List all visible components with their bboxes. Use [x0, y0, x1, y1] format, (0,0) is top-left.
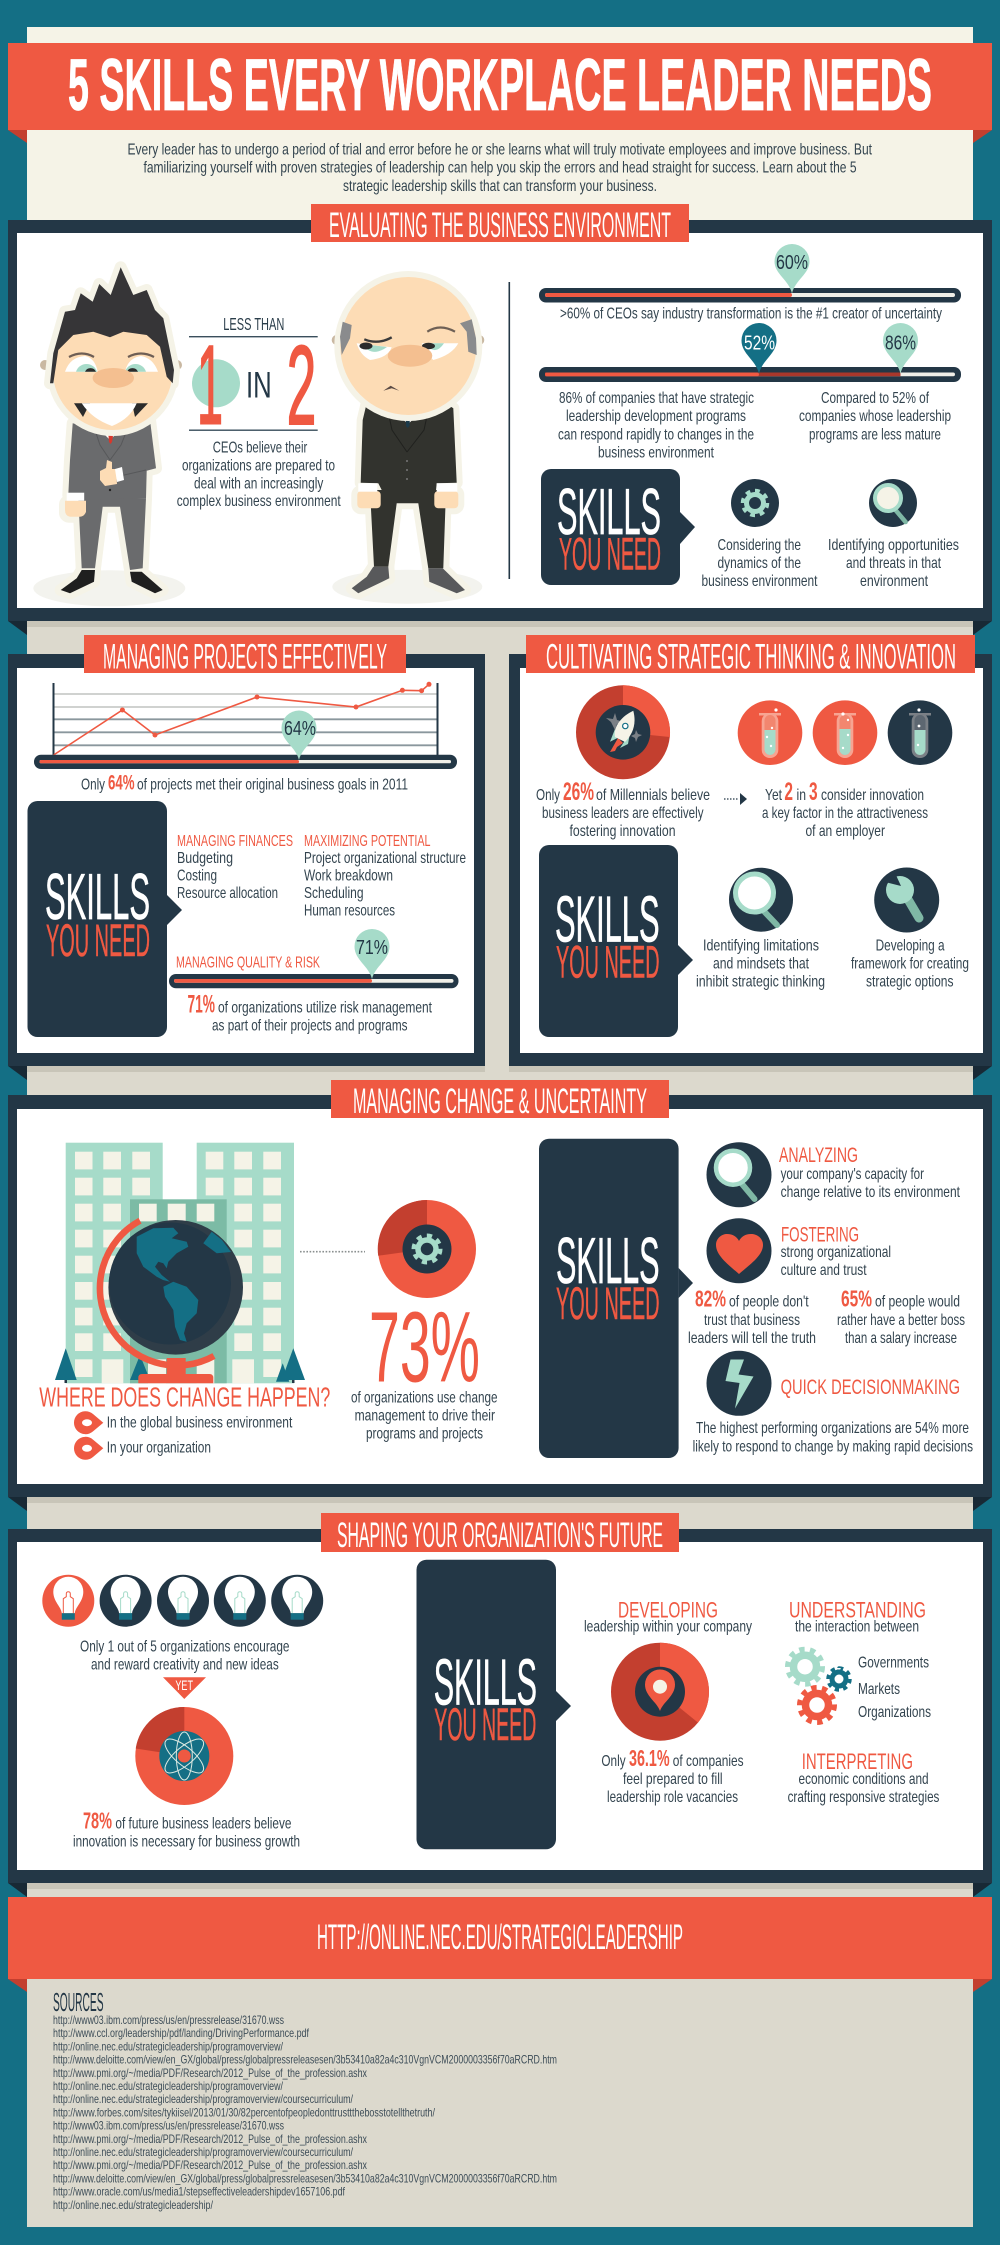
bullet: global business environment: In the global business environment: [107, 1414, 293, 1431]
text: only 64 percent of projects: of projects met their original business goals in 2011: [137, 776, 408, 793]
pin: 64%: 64%: [284, 718, 316, 740]
statistic: less than 1 in 2: 2: [287, 323, 316, 448]
panel: managing change and uncertainty: MANAGING CHANGE & UNCERTAINTY: [353, 1082, 647, 1121]
text: fostering: strong organizational: [781, 1244, 891, 1261]
statistic: 73 percent: 73%: [369, 1292, 480, 1404]
progress bar: 64 percent: [34, 710, 457, 769]
text: only 64 percent of projects: [81, 771, 408, 794]
list: governments markets organizations: Governments: [858, 1655, 929, 1672]
list: managing finances: Costing: [177, 868, 217, 885]
text: yet 2 in 3: of an employer: [806, 823, 885, 840]
text: considering the dynamics: [702, 537, 818, 590]
donut chart: 36.1 percent with pin: [611, 1643, 709, 1741]
sources list: http://www.pmi.org/~/media/PDF/Research/2012_Pulse_of_the_profession.ashx: [53, 2066, 367, 2080]
text: analyzing: [779, 1144, 960, 1201]
icon: atom: [160, 1732, 208, 1780]
text: 78 percent of future leaders: innovation is necessary for business growth: [73, 1834, 300, 1851]
panel: managing change and uncertainty: [8, 1080, 992, 1511]
callout: skills you need: [539, 845, 693, 1037]
text: compared to 52 percent: Compared to 52% of: [821, 390, 929, 407]
text: only 26 percent of millennials: of Millennials believe: [596, 787, 710, 804]
text: only 1 out of 5: and reward creativity and new ideas: [91, 1657, 279, 1674]
list: maximizing potential: Human resources: [304, 903, 395, 920]
list: managing finances: [177, 833, 293, 902]
bullet: global business environment: [74, 1411, 293, 1434]
text: 71 percent of organizations: [188, 991, 432, 1035]
text: identifying opportunities: environment: [860, 573, 928, 590]
text: 65 percent of people: of people would: [875, 1294, 960, 1311]
text: considering the dynamics: Considering the: [718, 537, 801, 554]
banner: website url: [8, 1897, 992, 1992]
text: understanding: UNDERSTANDING: [789, 1598, 926, 1623]
icon: rocket: [606, 711, 642, 752]
text: 71 percent of organizations: as part of their projects and programs: [212, 1018, 408, 1035]
text: yet 2 in 3: a key factor in the attractiveness: [762, 805, 928, 822]
callout: skills you need: [28, 801, 182, 1037]
text: only 26 percent of millennials: 26%: [563, 778, 594, 806]
sources list: http://www03.ibm.com/press/us/en/pressrelease/31670.wss: [53, 2119, 284, 2133]
sources list: http://www.deloitte.com/view/en_GX/global/press/globalpressreleasesen/3b53410a82a4c310VgnVCM2000003356f70aRCRD.htm: [53, 2053, 557, 2067]
text: fostering: culture and trust: [781, 1262, 867, 1279]
sources list: [53, 1987, 557, 2212]
icon: test tube three: [888, 700, 952, 765]
text: yet 2 in 3: in: [796, 787, 806, 804]
sources list: http://www.oracle.com/us/media1/stepseffectiveleadershipdev1657106.pdf: [53, 2185, 345, 2199]
text: analyzing: your company's capacity for: [781, 1166, 924, 1183]
callout: skills you need: YOU NEED: [556, 1278, 660, 1329]
text: 82 percent of people: [688, 1286, 816, 1347]
bullet: your organization: [74, 1437, 211, 1460]
list: maximizing potential: [304, 833, 466, 920]
progress bar: 52 and 86 percent: [539, 323, 961, 462]
text: identifying opportunities: [828, 537, 959, 590]
text: developing: [584, 1598, 752, 1636]
text: 86 percent of companies: 86% of companies that have strategic: [559, 390, 754, 407]
sources list: http://online.nec.edu/strategicleadership/programoverview/: [53, 2079, 283, 2093]
divider: [508, 282, 510, 579]
panel: shaping your organization's future: [8, 1513, 992, 1897]
text: identifying limitations: [696, 938, 825, 991]
heading: managing projects: [84, 635, 406, 676]
list: maximizing potential: Work breakdown: [304, 868, 393, 885]
pin: 71%: 71%: [356, 937, 388, 959]
statistic: 73 percent: management to drive their: [355, 1408, 496, 1425]
heading: evaluating: [311, 204, 689, 245]
text: 82 percent of people: of people don't: [729, 1294, 809, 1311]
text: 65 percent of people: than a salary increase: [845, 1330, 957, 1347]
list: governments markets organizations: Organizations: [858, 1704, 931, 1721]
list: managing finances: Budgeting: [177, 850, 233, 867]
sources list: http://www.ccl.org/leadership/pdf/landing/DrivingPerformance.pdf: [53, 2026, 309, 2040]
sources list: http://www03.ibm.com/press/us/en/pressrelease/31670.wss: [53, 2013, 284, 2027]
panel: managing projects effectively: [8, 635, 485, 1080]
text: 82 percent of people: leaders will tell the truth: [688, 1330, 816, 1347]
text: analyzing: ANALYZING: [779, 1144, 858, 1167]
callout: skills you need: SKILLS: [556, 1224, 660, 1297]
text: only 36.1 percent: leadership role vacancies: [607, 1789, 738, 1806]
statistic: less than 1 in 2: 1: [197, 322, 223, 447]
list: maximizing potential: MAXIMIZING POTENTIAL: [304, 833, 431, 850]
callout: skills you need: YOU NEED: [556, 937, 660, 988]
statistic: less than 1 in 2: complex business environment: [177, 493, 341, 510]
donut chart: 73 percent with gear: [378, 1200, 476, 1298]
text: compared to 52 percent: companies whose leadership: [799, 408, 951, 425]
icon: lightning bolt: [706, 1351, 772, 1416]
illustration: frowning boss: [332, 277, 484, 604]
statistic: 73 percent: programs and projects: [366, 1426, 483, 1443]
text: yet 2 in 3: consider innovation: [821, 787, 924, 804]
text: identifying limitations: and mindsets that: [713, 956, 809, 973]
text: only 26 percent of millennials: business leaders are effectively: [542, 805, 704, 822]
text: interpreting: economic conditions and: [798, 1771, 929, 1788]
text: yet 2 in 3: Yet: [765, 787, 782, 804]
sources list: http://www.pmi.org/~/media/PDF/Research/2012_Pulse_of_the_profession.ashx: [53, 2132, 367, 2146]
sources list: SOURCES: [53, 1987, 104, 2017]
list: governments markets organizations: Markets: [858, 1681, 900, 1698]
text: 86 percent of companies: business environment: [598, 444, 714, 462]
callout: skills you need: YOU NEED: [559, 528, 661, 580]
pin: 86%: 86%: [885, 332, 916, 354]
statistic: 73 percent: [351, 1292, 498, 1443]
callout: skills you need: [416, 1560, 571, 1849]
icon: heart: [706, 1218, 772, 1283]
statistic: 73 percent: of organizations use change: [351, 1390, 498, 1407]
panel: cultivating strategic thinking: [509, 635, 992, 1080]
line chart: [54, 682, 438, 755]
statistic: less than 1 in 2: LESS THAN: [223, 314, 284, 334]
panel: evaluating the business environment: [8, 204, 992, 635]
text: only 26 percent of millennials: fostering innovation: [570, 823, 676, 840]
icon: test tube two: [813, 700, 877, 765]
text: only 36.1 percent: 36.1%: [629, 1745, 670, 1771]
icon: test tube one: [738, 700, 802, 765]
icon: magnifying glass: [869, 479, 917, 527]
sources list: http://online.nec.edu/strategicleadership/: [53, 2198, 213, 2212]
statistic: less than 1 in 2: [177, 314, 341, 510]
text: developing: DEVELOPING: [618, 1598, 718, 1623]
donut chart: 26 percent with rocket: [576, 685, 670, 779]
text: yet 2 in 3: 3: [809, 778, 818, 806]
icon: magnifying glass: [729, 868, 793, 932]
text: only 26 percent of millennials: [536, 778, 710, 840]
text: fostering: FOSTERING: [781, 1224, 859, 1247]
text: compared to 52 percent: [799, 390, 951, 443]
text: identifying opportunities: Identifying opportunities: [828, 537, 959, 554]
text: only 64 percent of projects: 64%: [108, 771, 135, 794]
statistic: less than 1 in 2: deal with an increasingly: [194, 476, 323, 493]
text: compared to 52 percent: programs are less mature: [809, 426, 941, 443]
icon: wrench: [874, 868, 939, 932]
callout: skills you need: YOU NEED: [46, 915, 150, 966]
sources list: http://online.nec.edu/strategicleadership/programoverview/: [53, 2039, 283, 2053]
text: only 36.1 percent: feel prepared to fill: [623, 1771, 723, 1788]
intro paragraph: strategic leadership skills that can transform your business.: [343, 178, 657, 195]
bullet: your organization: In your organization: [107, 1440, 211, 1457]
sources list: http://www.forbes.com/sites/tykiisel/2013/01/30/82percentofpeopledonttrusttthebosstotellthetruth/: [53, 2105, 435, 2119]
icon: magnifying glass: [706, 1142, 772, 1207]
icon: location pin: [645, 1670, 675, 1711]
list: managing finances: Resource allocation: [177, 885, 278, 902]
statistic: less than 1 in 2: IN: [246, 364, 272, 406]
list: managing finances: MANAGING FINANCES: [177, 833, 293, 850]
list: governments markets organizations: [858, 1655, 931, 1721]
text: 65 percent of people: [837, 1286, 965, 1347]
list: maximizing potential: Scheduling: [304, 885, 364, 902]
text: 78 percent of future leaders: of future business leaders believe: [115, 1815, 292, 1832]
text: considering the dynamics: business environment: [702, 573, 818, 590]
pin: 71%: [354, 929, 390, 979]
statistic: less than 1 in 2: organizations are prepared to: [182, 458, 335, 475]
icon: three gears: [788, 1649, 850, 1722]
progress bar: 60 percent: [539, 244, 961, 322]
callout: skills you need: SKILLS: [557, 475, 661, 548]
text: 82 percent of people: 82%: [695, 1286, 726, 1312]
text: 65 percent of people: 65%: [841, 1286, 872, 1312]
sources list: http://www.pmi.org/~/media/PDF/Research/2012_Pulse_of_the_profession.ashx: [53, 2158, 367, 2172]
sources list: http://online.nec.edu/strategicleadership/programoverview/coursecurriculum/: [53, 2092, 353, 2106]
heading: managing change: [331, 1080, 669, 1121]
text: interpreting: [788, 1749, 939, 1806]
text: only 36.1 percent: of companies: [673, 1753, 744, 1770]
text: only 1 out of 5: Only 1 out of 5 organizations encourage: [80, 1639, 290, 1656]
text: 71 percent of organizations: of organizations utilize risk management: [218, 1000, 432, 1017]
text: developing a framework: Developing a: [876, 938, 945, 955]
text: fostering: [781, 1224, 891, 1279]
text: only 26 percent of millennials: Only: [536, 787, 560, 804]
text: identifying limitations: inhibit strategic thinking: [696, 974, 825, 991]
callout: skills you need: SKILLS: [45, 860, 150, 933]
text: 86 percent of companies: [558, 390, 754, 462]
text: yet 2 in 3: [762, 778, 928, 840]
sources list: http://www.deloitte.com/view/en_GX/global/press/globalpressreleasesen/3b53410a82a4c310VgnVCM2000003356f70aRCRD.htm: [53, 2171, 557, 2185]
text: 71 percent of organizations: 71%: [188, 991, 215, 1019]
sources list: http://online.nec.edu/strategicleadership/programoverview/coursecurriculum/: [53, 2145, 353, 2159]
heading: shaping: [321, 1513, 679, 1555]
illustration: buildings and globe: [55, 1143, 305, 1383]
text: interpreting: crafting responsive strategies: [788, 1789, 939, 1806]
text: only 1 out of 5: [80, 1639, 290, 1674]
statistic: less than 1 in 2: CEOs believe their: [213, 440, 308, 457]
text: 82 percent of people: trust that business: [704, 1312, 800, 1329]
arrow: yet: YET: [175, 1677, 193, 1693]
callout: skills you need: [539, 1139, 693, 1458]
icon: gear: [731, 479, 779, 527]
callout: skills you need: SKILLS: [555, 883, 660, 956]
text: 86 percent of companies: can respond rapidly to changes in the: [558, 426, 754, 443]
text: only 36.1 percent: [601, 1745, 744, 1806]
pin: 64%: [282, 710, 316, 760]
intro paragraph: [128, 142, 872, 195]
text: interpreting: INTERPRETING: [802, 1749, 913, 1774]
text: quick decisionmaking: [693, 1376, 973, 1456]
text: only 64 percent of projects: Only: [81, 776, 105, 793]
pin: 60%: 60%: [776, 252, 808, 274]
header panel: [8, 27, 992, 220]
donut chart: 78 percent with atom: [135, 1707, 233, 1805]
callout: skills you need: YOU NEED: [434, 1699, 536, 1750]
text: identifying opportunities: and threats in that: [846, 555, 941, 572]
icon row: light bulbs: [42, 1575, 323, 1627]
text: 78 percent of future leaders: [73, 1807, 300, 1851]
pin: 52%: [742, 323, 776, 374]
text: identifying limitations: Identifying limitations: [703, 938, 819, 955]
heading: quality and risk: MANAGING QUALITY & RISK: [176, 955, 320, 972]
text: 78 percent of future leaders: 78%: [83, 1807, 112, 1833]
text: developing a framework: strategic options: [866, 974, 954, 991]
text: developing: leadership within your company: [584, 1619, 752, 1636]
progress bar: 71 percent: [169, 929, 458, 988]
text: yet 2 in 3: 2: [784, 778, 793, 806]
list: maximizing potential: Project organizational structure: [304, 850, 466, 867]
illustration: smiling businessman: [33, 267, 185, 606]
arrow: dotted: [724, 793, 747, 805]
heading: where does change happen: WHERE DOES CHANGE HAPPEN?: [39, 1382, 330, 1413]
panel: managing projects effectively: MANAGING PROJECTS EFFECTIVELY: [103, 638, 387, 676]
text: understanding: [789, 1598, 926, 1636]
callout: skills you need: SKILLS: [434, 1645, 537, 1718]
arrow: yet: [163, 1677, 206, 1699]
callout: skills you need: [541, 469, 695, 585]
pin: 86%: [883, 323, 918, 374]
text: developing a framework: [851, 938, 969, 991]
connector: dotted: [300, 1251, 365, 1253]
pin: 60%: [774, 244, 810, 294]
text: only 36.1 percent: Only: [601, 1753, 626, 1770]
text: 86 percent of companies: leadership development programs: [566, 408, 746, 425]
pin: 52%: 52%: [744, 332, 775, 354]
text: understanding: the interaction between: [795, 1619, 919, 1636]
text: considering the dynamics: dynamics of the: [718, 555, 801, 572]
